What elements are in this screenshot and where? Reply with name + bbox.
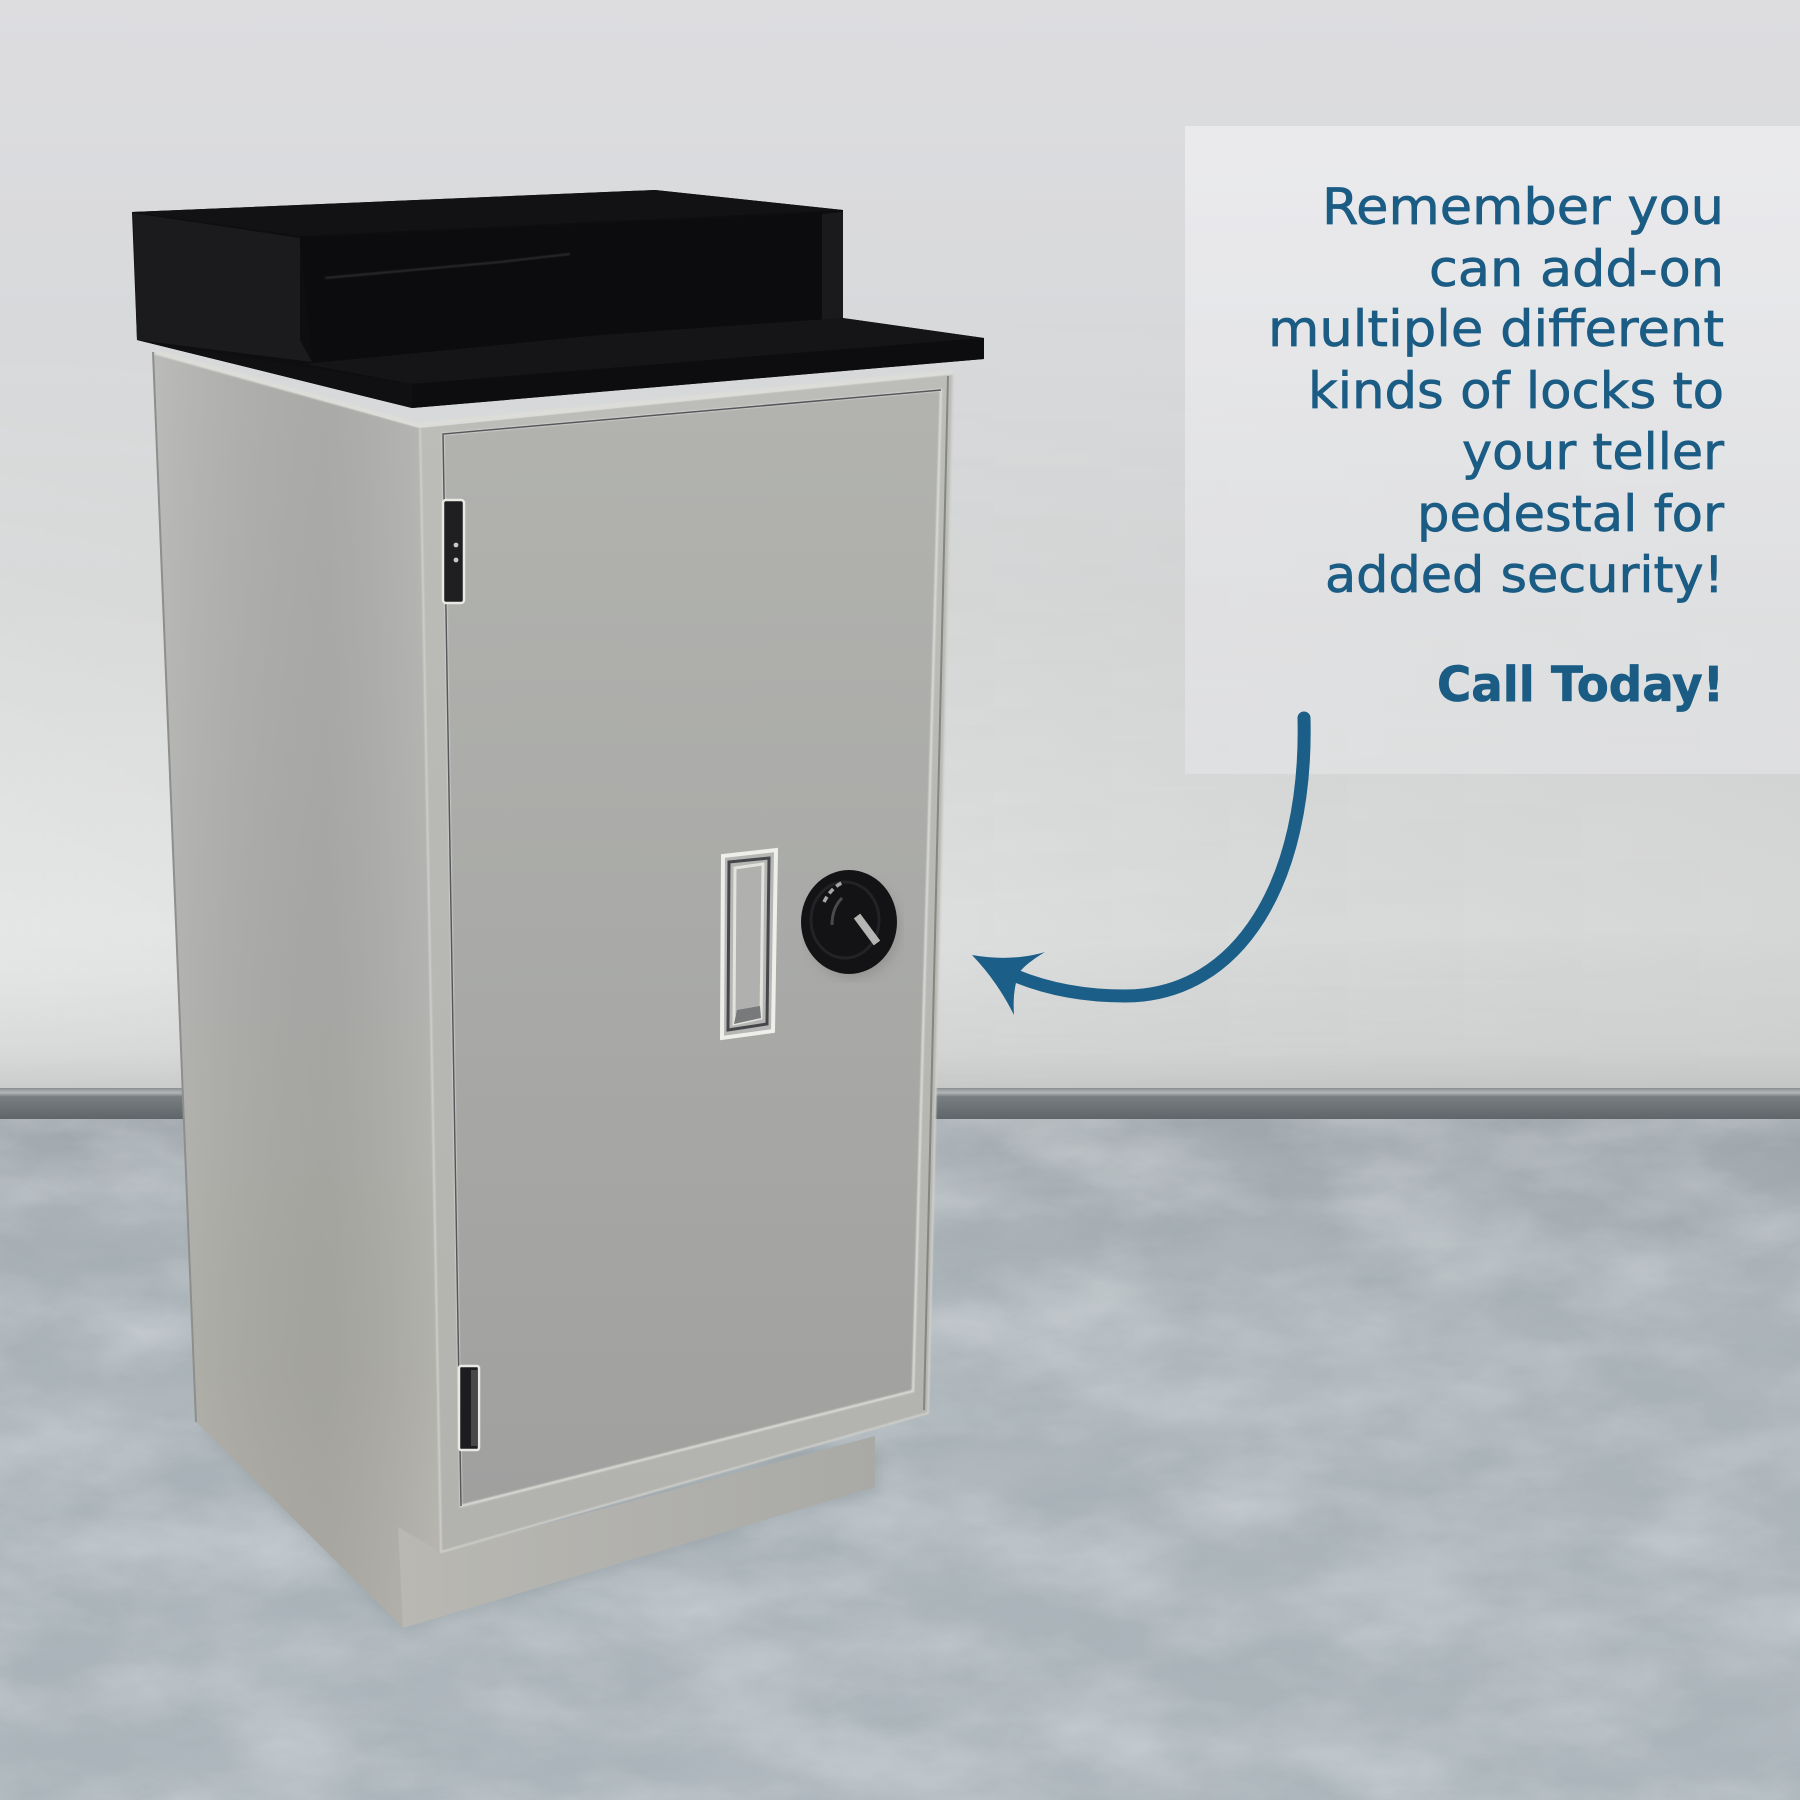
floor: [0, 1118, 1800, 1800]
line 6: pedestal for: [1417, 485, 1724, 543]
line 3: multiple different: [1268, 300, 1724, 358]
black counter top: [132, 190, 984, 408]
left guard end: [133, 213, 312, 362]
top hinge: [443, 500, 464, 603]
guard interior: [300, 212, 843, 362]
counter left edge: [137, 340, 412, 408]
baseboard: [0, 1088, 1800, 1119]
line 2: can add-on: [1429, 240, 1724, 298]
cabinet side panel: [153, 352, 441, 1628]
arrow pointing to lock: [972, 718, 1304, 1015]
door panel: [443, 390, 941, 1506]
guard top edge: [132, 190, 843, 236]
inner shelf highlight: [325, 254, 570, 278]
cabinet toe kick: [398, 1436, 875, 1628]
door pull handle: [722, 850, 776, 1038]
counter surface: [305, 318, 984, 384]
counter front edge: [412, 338, 984, 408]
line 5: your teller: [1462, 423, 1724, 481]
line 7: added security!: [1325, 546, 1724, 604]
bottom hinge: [459, 1366, 479, 1450]
door frame: [155, 352, 953, 1552]
combination lock dial: [801, 870, 899, 978]
line 4: kinds of locks to: [1308, 362, 1724, 420]
background wall: [0, 768, 1800, 1088]
cabinet floor shadow: [196, 1425, 880, 1632]
line 1: Remember you: [1322, 178, 1724, 236]
teller pedestal cabinet: [132, 190, 984, 1632]
right guard return: [822, 212, 843, 320]
callout panel: [1185, 126, 1800, 774]
callout text: [1268, 178, 1724, 713]
call to action: Call Today!: [1437, 657, 1724, 713]
